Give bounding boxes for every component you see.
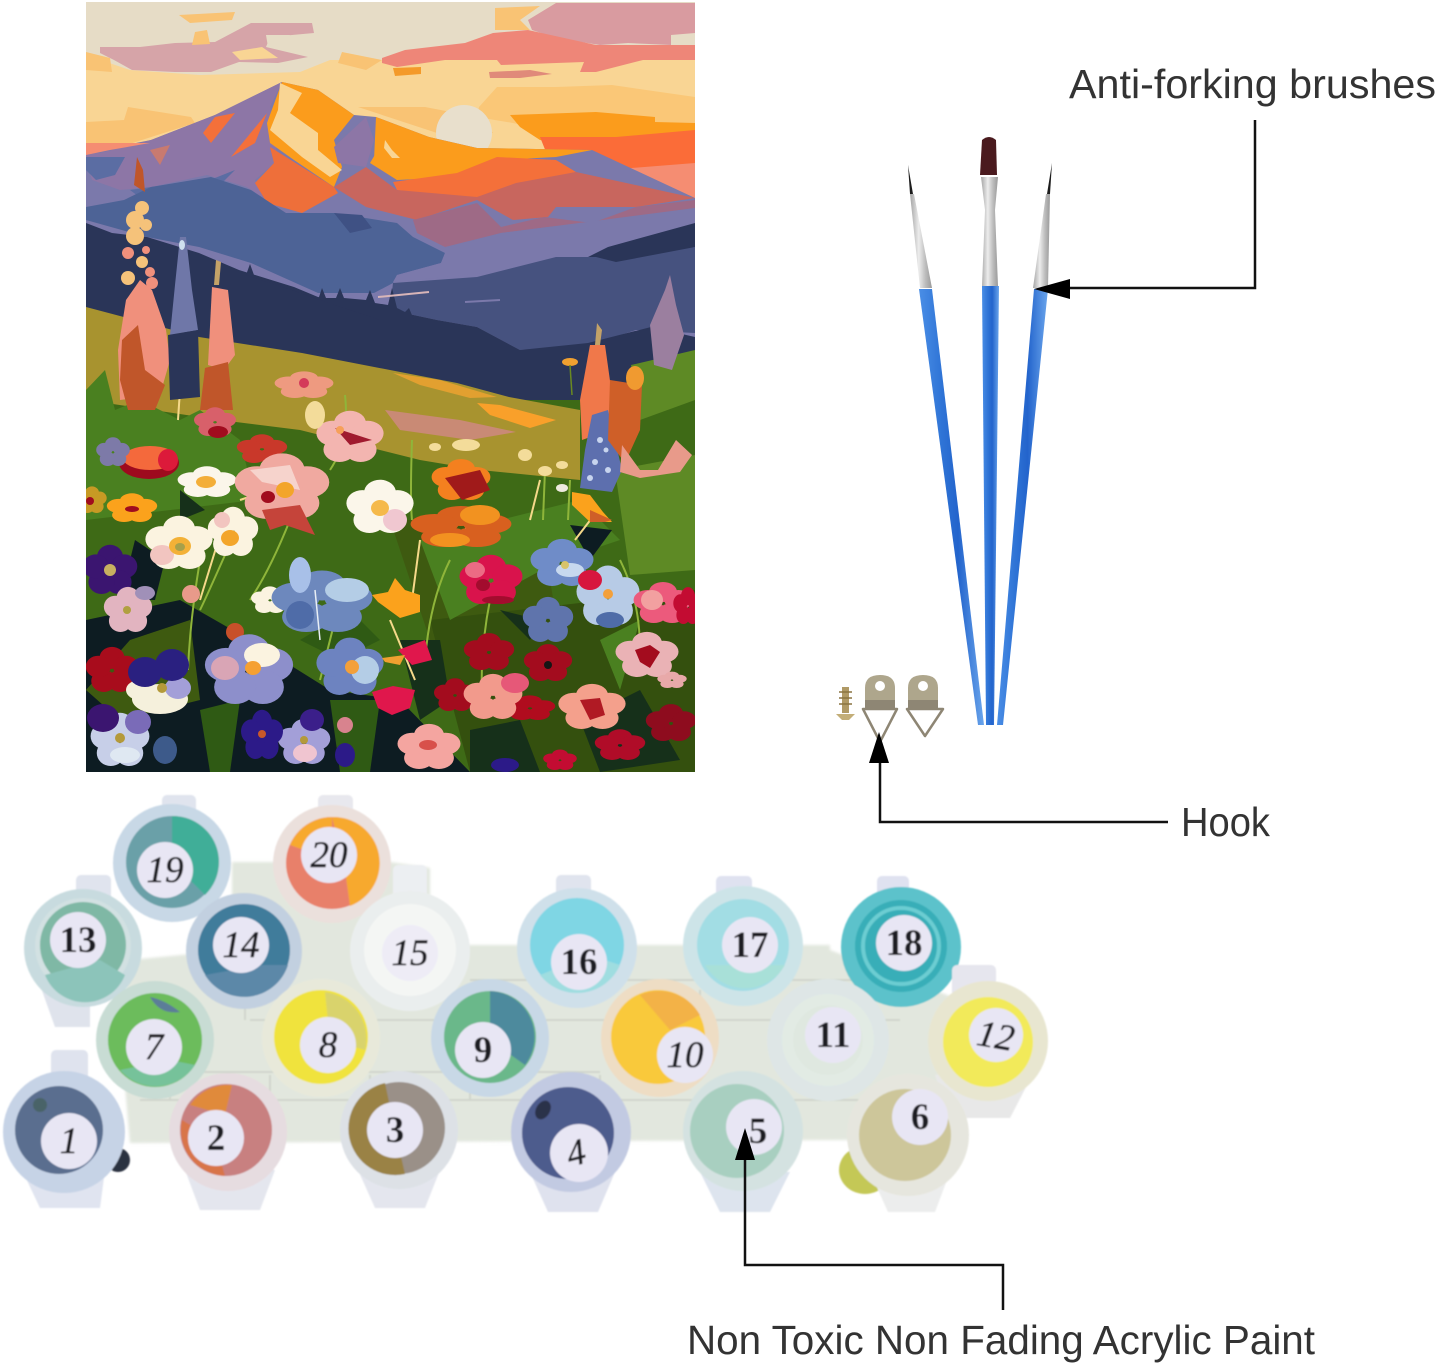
arrow: hook callout [869,732,1168,822]
label: brushes: Anti-forking brushes [1069,61,1436,107]
pot 13 [24,875,142,1027]
pot 6: 6 [911,1097,929,1138]
pot 14 [186,893,302,1009]
paint pot set [3,795,1048,1212]
pot 12: 12 [974,1013,1018,1060]
red and pink flowers [86,555,703,770]
sun [436,105,492,148]
pot 8: 8 [319,1025,338,1066]
upper meadow flowers [77,371,612,547]
pot 17: 17 [732,925,768,966]
sky with sunset clouds [86,2,695,198]
pot 11 [767,979,889,1101]
white and purple left flowers [83,507,289,641]
pot 9: 9 [474,1030,492,1071]
screw [836,687,855,720]
pot 1: 1 [60,1121,78,1162]
pot 7: 7 [145,1027,165,1068]
pot 1 [3,1050,130,1208]
pot 4: 4 [562,1131,590,1176]
hook one [863,675,897,742]
right brush [997,163,1052,725]
mountain range [86,82,695,420]
centre flat brush [980,137,999,725]
pansies [87,649,519,772]
pot 5 [683,1071,803,1212]
label: paint: Non Toxic Non Fading Acrylic Paint [687,1317,1316,1363]
pot 7 [96,981,214,1099]
pot 6 [839,1074,969,1212]
pot 16 [517,875,637,1008]
pot 10 [601,979,719,1097]
pot 3: 3 [386,1110,404,1151]
pot 18 [841,876,961,1007]
left brush [908,165,984,725]
arrow: brushes callout [1034,120,1255,299]
pot 19: 19 [146,850,184,891]
pot 12 [928,965,1048,1118]
brushes [908,137,1052,725]
pot 20: 20 [310,835,348,876]
arrow: paint callout [735,1128,1003,1310]
pot 8 [262,979,380,1097]
pot 2 [169,1073,287,1210]
pot 16: 16 [560,942,598,983]
pot 15: 15 [392,933,428,974]
pot 13: 13 [60,920,96,961]
wildflowers [77,371,703,772]
pot 20 [273,795,391,923]
blue flowers [205,539,639,704]
plastic tray [120,862,960,1143]
label: hook: Hook [1181,799,1270,845]
pot 3 [340,1071,458,1208]
pot 18: 18 [886,923,922,964]
pot 4 [511,1072,631,1212]
pot 15 [350,865,470,1011]
pot 2: 2 [207,1118,225,1159]
pot 11: 11 [816,1015,850,1056]
pot 19 [113,795,231,922]
hanging hooks and screw [836,675,943,742]
pot 9 [431,979,549,1097]
pot 14: 14 [222,925,260,966]
pot 17 [683,876,803,1006]
painting: mountain sunset and wildflower meadow [77,2,703,772]
pot 10: 10 [666,1035,704,1076]
hook two [907,675,943,736]
lupine flower spikes [118,157,692,492]
pot 5: 5 [749,1111,767,1152]
meadow slope and grass [86,307,695,772]
